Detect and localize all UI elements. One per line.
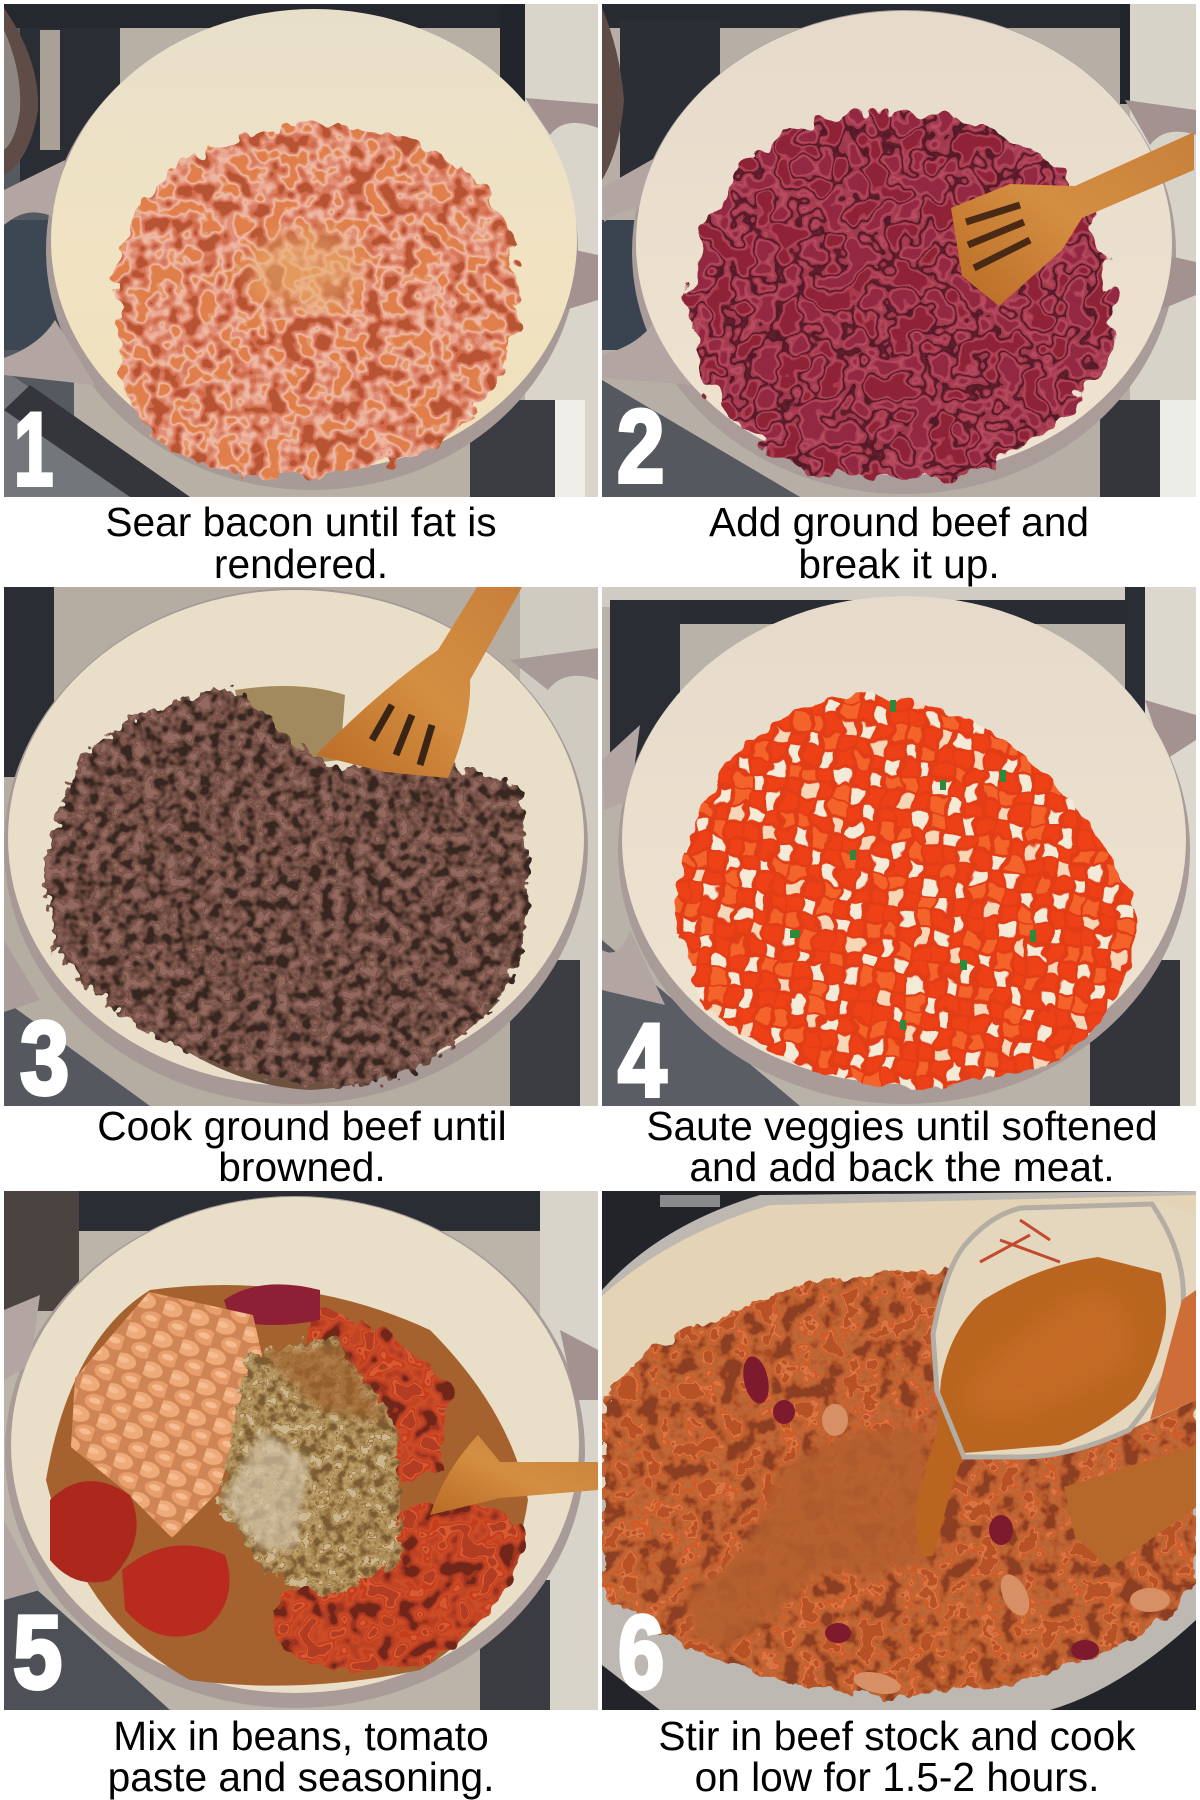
caption 3 xyxy=(97,1103,507,1190)
wooden spoon xyxy=(1064,1445,1198,1568)
wooden spoon xyxy=(951,132,1194,306)
step number 3: 3 xyxy=(20,1001,69,1117)
caption 2: break it up. xyxy=(798,541,1000,587)
pot body xyxy=(5,1196,585,1708)
step number 2: 2 xyxy=(617,389,664,505)
diced peppers and onions xyxy=(674,695,1136,1086)
pot body xyxy=(46,84,578,490)
caption 4 xyxy=(646,1103,1158,1190)
caption 3: browned. xyxy=(218,1144,386,1190)
panel: step 2 add ground beef xyxy=(602,4,1196,587)
chili powder and peppers xyxy=(300,1310,450,1500)
stock in cup xyxy=(916,1257,1166,1556)
caption 5: paste and seasoning. xyxy=(108,1754,494,1800)
photo: browned beef in pot xyxy=(4,587,598,1106)
photo: raw beef in pot xyxy=(602,4,1196,497)
caption 2: Add ground beef and xyxy=(709,499,1089,545)
caption 1 xyxy=(105,499,497,587)
panel: step 5 mix in beans xyxy=(4,1191,598,1800)
panel: step 1 sear bacon xyxy=(4,4,598,587)
wooden spoon xyxy=(430,1435,598,1515)
wooden spoon xyxy=(316,587,522,778)
chili xyxy=(602,1270,1196,1698)
step number 4: 4 xyxy=(618,1003,667,1119)
step number 1: 1 xyxy=(14,390,53,507)
step number 6: 6 xyxy=(618,1594,664,1710)
browned beef xyxy=(44,690,528,1086)
kidney beans xyxy=(224,1284,320,1325)
panel: step 3 cook ground beef xyxy=(4,587,598,1190)
caption 6: Stir in beef stock and cook xyxy=(658,1713,1136,1759)
tomato paste xyxy=(50,1481,137,1582)
caption 5 xyxy=(108,1713,494,1800)
pot body xyxy=(632,10,1176,494)
caption 4: and add back the meat. xyxy=(689,1144,1115,1190)
broth xyxy=(235,686,345,770)
photo: bacon in pot xyxy=(4,4,598,497)
panel: step 6 stir in beef stock xyxy=(602,1191,1198,1800)
photo: beans, paste and seasoning in pot xyxy=(4,1191,598,1710)
raw beef xyxy=(688,110,1113,479)
kidney beans xyxy=(739,1354,1099,1660)
panel: step 4 saute veggies xyxy=(602,587,1196,1190)
caption 2 xyxy=(709,499,1089,587)
photo: stock poured into chili xyxy=(602,1191,1198,1710)
pot body xyxy=(618,596,1190,1104)
caption 4: Saute veggies until softened xyxy=(646,1103,1158,1149)
pot body xyxy=(4,588,588,1104)
caption 5: Mix in beans, tomato xyxy=(113,1713,489,1759)
white beans xyxy=(71,1292,262,1538)
caption 1: Sear bacon until fat is xyxy=(105,499,497,545)
caption 3: Cook ground beef until xyxy=(97,1103,507,1149)
broth xyxy=(46,1285,528,1686)
measuring cup xyxy=(933,1200,1196,1457)
seasoning xyxy=(218,1337,402,1596)
caption 6: on low for 1.5-2 hours. xyxy=(695,1754,1099,1800)
sauce pool xyxy=(688,1429,930,1650)
caption 6 xyxy=(658,1713,1136,1800)
photo: peppers and onions in pot xyxy=(602,587,1196,1106)
pot body xyxy=(602,1191,1196,1710)
white beans xyxy=(822,1404,1170,1698)
caption 1: rendered. xyxy=(214,541,388,587)
step number 5: 5 xyxy=(13,1595,62,1711)
bacon xyxy=(115,125,519,476)
